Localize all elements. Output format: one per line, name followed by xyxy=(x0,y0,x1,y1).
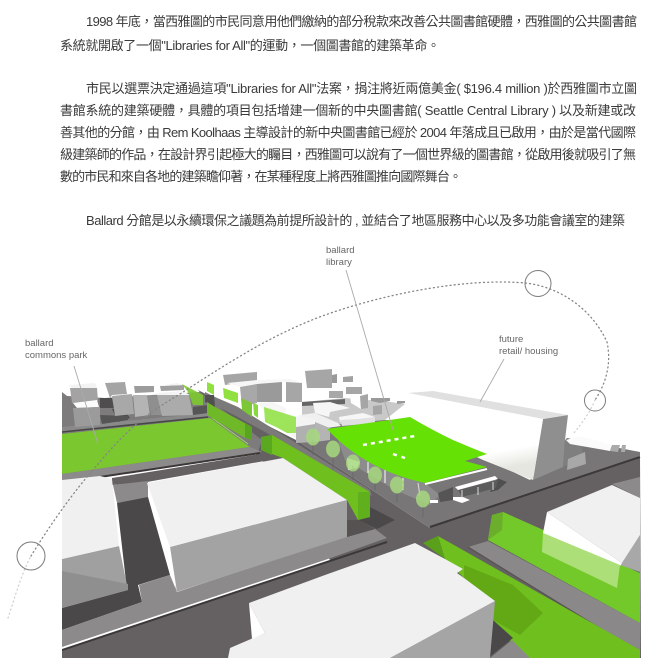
translucent green street frontage xyxy=(182,382,296,440)
central building cluster xyxy=(223,369,405,443)
text block: paragraph 2: 數的市民和來自各地的建築瞻仰著，在某種程度上將西雅圖推向國際舞台。 xyxy=(60,169,462,184)
text block: paragraph 1 xyxy=(60,14,637,53)
leader lines xyxy=(74,270,504,444)
future retail and housing building xyxy=(405,391,626,480)
text block: paragraph 2: 市民以選票決定通過這項"Libraries for All"法案，捐注將近兩億美金( $196.4 million )於西雅圖市立圖 xyxy=(86,81,637,96)
label: ballard commons park: ballard xyxy=(25,338,54,349)
text block: paragraph 1: 1998 年底，當西雅圖的市民同意用他們繳納的部分稅款來改善公共圖書館硬體，西雅圖的公共圖書館 xyxy=(86,14,637,29)
ballard commons park lawn xyxy=(62,418,262,481)
text block: paragraph 2 xyxy=(60,81,637,184)
right building xyxy=(542,485,640,588)
marker circles xyxy=(17,270,606,570)
middle building xyxy=(147,458,347,592)
green buffer along street xyxy=(261,435,370,520)
text block: paragraph 1: 系統就開啟了一個"Libraries for All"的運動，一個圖書館的建築革命。 xyxy=(60,38,440,53)
dotted flight path xyxy=(8,282,609,618)
label: future retail/ housing: future xyxy=(499,334,523,345)
lower left street blocks xyxy=(62,454,395,647)
street trees xyxy=(306,428,430,517)
library green roof xyxy=(327,417,487,483)
label: ballard library: ballard xyxy=(326,245,355,256)
text block: paragraph 2: 善其他的分館，由 Rem Koolhaas 主導設計的新中央圖書館已經於 2004 年落成且已啟用，由於是當代國際 xyxy=(60,125,636,140)
label: future retail/ housing: retail/ housing xyxy=(499,346,558,357)
left building xyxy=(62,476,128,608)
upper left building cluster xyxy=(69,382,208,427)
library building under roof xyxy=(338,440,507,505)
text block: paragraph 2: 級建築師的作品，在設計界引起極大的矚目，西雅圖可以說有了一個世界級的圖書館，從啟用後就吸引了無 xyxy=(60,147,636,162)
bottom center building xyxy=(228,543,495,658)
label: ballard commons park: commons park xyxy=(25,350,88,361)
lower right street: sidewalk and green strips xyxy=(423,477,640,658)
site model illustration xyxy=(62,369,641,658)
text block: paragraph 2: 書館系統的建築硬體，具體的項目包括增建一個新的中央圖書館( Seattle Central Library ) 以及新建或改 xyxy=(60,103,636,118)
ground and streets xyxy=(62,390,641,658)
label: ballard library: library xyxy=(326,257,352,268)
text block: paragraph 3: Ballard 分館是以永續環保之議題為前提所設計的 , 並結合了地區服務中心以及多功能會議室的建築 xyxy=(86,213,625,228)
